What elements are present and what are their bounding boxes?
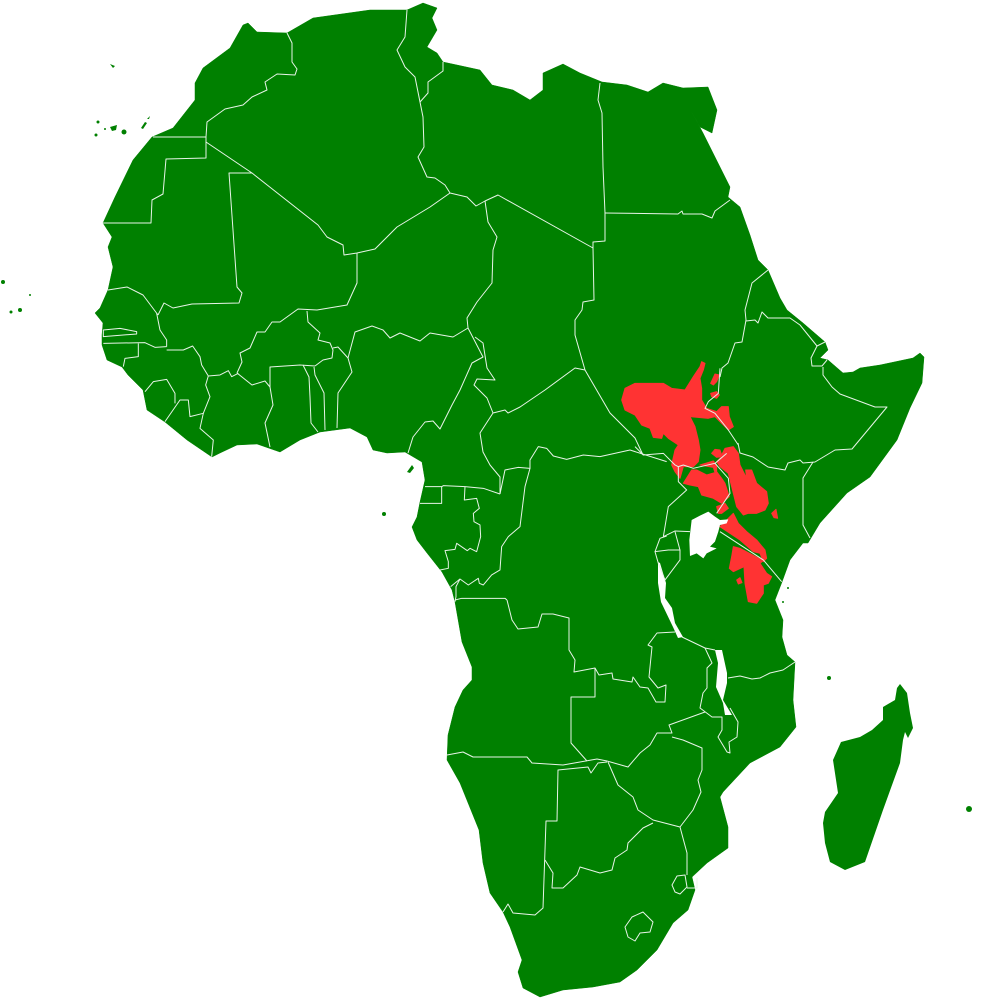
- east africa borders: [635, 368, 782, 582]
- madagascar: [823, 684, 913, 870]
- lakes: [658, 562, 732, 715]
- horn of africa borders: [720, 270, 768, 377]
- north and sahel borders: [103, 10, 730, 494]
- southern africa borders: [507, 600, 675, 702]
- lesotho: [625, 912, 653, 941]
- west africa borders: [103, 313, 238, 457]
- central africa borders: [420, 447, 667, 602]
- islands: [1, 64, 972, 812]
- red distribution range: [622, 362, 778, 603]
- lake victoria: [689, 512, 728, 558]
- swaziland: [672, 875, 687, 894]
